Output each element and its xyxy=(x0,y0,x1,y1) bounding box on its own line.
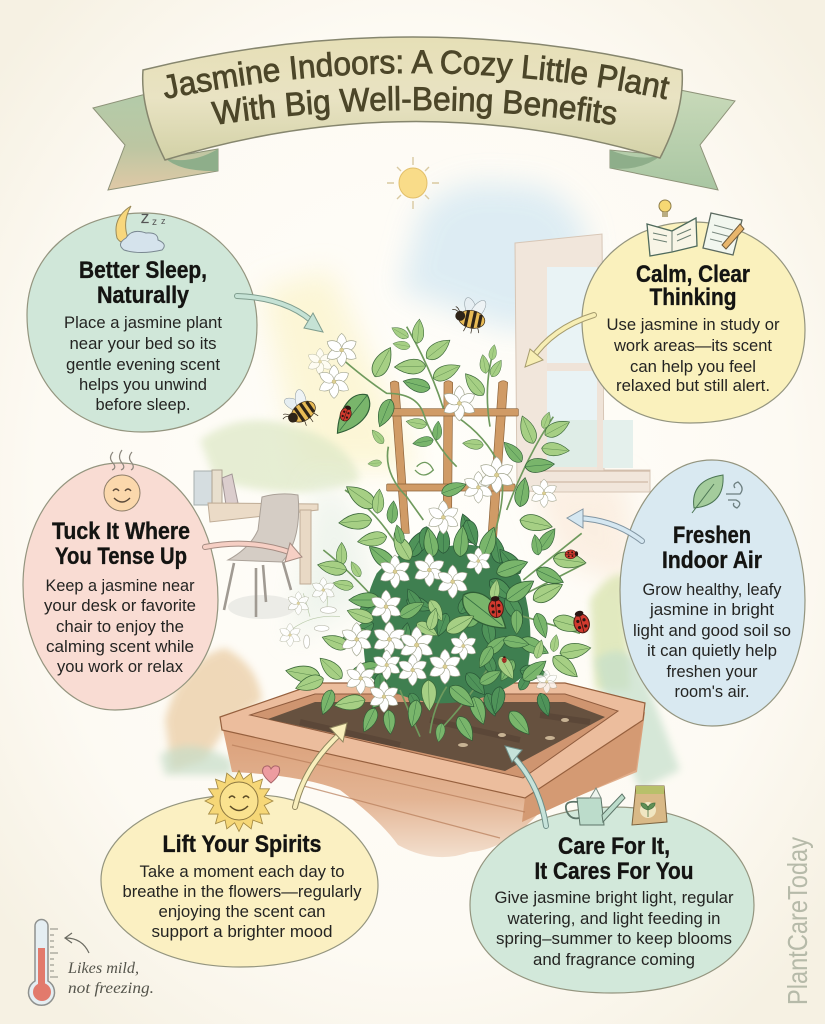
body text: Place a jasmine plant xyxy=(64,313,222,332)
thermometer note xyxy=(28,920,154,1005)
heading: Better Sleep, xyxy=(79,257,207,284)
title text: Jasmine Indoors: A Cozy Little Plant xyxy=(164,50,670,100)
heading xyxy=(636,261,750,311)
body text: helps you unwind xyxy=(79,375,207,394)
body text: spring–summer to keep blooms xyxy=(496,929,732,948)
note text: not freezing. xyxy=(68,980,154,997)
body text: support a brighter mood xyxy=(152,922,332,941)
body text xyxy=(606,315,780,395)
soil xyxy=(268,702,605,771)
body text: before sleep. xyxy=(96,395,190,414)
bees xyxy=(273,293,490,435)
desk, chair and books xyxy=(194,470,318,619)
icon: moon, cloud and zzz xyxy=(116,206,166,252)
icon: smiling face with steam xyxy=(104,450,140,511)
body text: watering, and light feeding in xyxy=(507,909,720,928)
body text xyxy=(633,580,791,701)
icon: moon, cloud and zzz: z xyxy=(161,216,166,226)
body text: your desk or favorite xyxy=(44,596,196,615)
body text xyxy=(122,862,362,941)
arrow: calm to plant xyxy=(525,315,594,367)
note text xyxy=(67,960,154,997)
body text: Grow healthy, leafy xyxy=(642,580,782,599)
mid leaves filling the bush xyxy=(342,525,551,728)
arrow: sleep to plant xyxy=(237,296,323,332)
bush shadow mass xyxy=(363,545,530,703)
body text: it can quietly help xyxy=(647,641,777,660)
faded white left branch xyxy=(278,577,340,648)
trellis xyxy=(387,381,518,537)
arrow: tense to plant xyxy=(205,543,302,562)
stems xyxy=(323,327,585,737)
arrow: air to plant xyxy=(567,509,642,541)
heading xyxy=(534,833,694,885)
body text: chair to enjoy the xyxy=(56,617,184,636)
arrow: care to plant xyxy=(505,746,546,826)
body text: Keep a jasmine near xyxy=(46,576,195,595)
panel: Lift Your Spirits xyxy=(101,766,378,967)
body text xyxy=(494,888,734,969)
title banner xyxy=(92,36,736,191)
heading: Naturally xyxy=(97,282,190,309)
body text: work areas—its scent xyxy=(613,336,772,355)
icon: smiling sun and heart xyxy=(205,766,280,831)
heading: Lift Your Spirits xyxy=(162,831,322,858)
body text: jasmine in bright xyxy=(649,600,774,619)
body text: gentle evening scent xyxy=(66,355,220,374)
heading: Freshen xyxy=(673,522,751,549)
jasmine plant on trellis xyxy=(273,293,592,744)
heading xyxy=(52,518,190,570)
icon: moon, cloud and zzz: Z xyxy=(141,211,149,226)
background scene: sky, rays, foliage washes xyxy=(160,183,680,790)
panel: Calm, Clear Thinking xyxy=(582,200,805,423)
jasmine flowers xyxy=(307,333,558,712)
body text: relaxed but still alert. xyxy=(616,376,770,395)
left ribbon tail xyxy=(93,94,218,190)
body text: light and good soil so xyxy=(633,621,791,640)
body text: freshen your xyxy=(666,662,758,681)
window xyxy=(515,234,650,492)
heading: You Tense Up xyxy=(55,543,187,570)
icon: watering can and fertilizer bag xyxy=(566,786,667,825)
watermark: PlantCareToday xyxy=(782,837,813,1005)
body text: can help you feel xyxy=(630,357,756,376)
body text: calming scent while xyxy=(46,637,194,656)
note text: Likes mild, xyxy=(67,960,139,977)
foliage leaves xyxy=(284,319,592,744)
body text: Use jasmine in study or xyxy=(606,315,780,334)
icon: moon, cloud and zzz: z xyxy=(152,217,157,228)
panel: Freshen Indoor Air xyxy=(620,460,805,726)
panel: Better Sleep, Naturally xyxy=(27,206,257,432)
banner body xyxy=(143,37,682,160)
right ribbon tail xyxy=(610,90,735,190)
body text xyxy=(44,576,196,676)
sun xyxy=(387,157,439,209)
panel: Tuck It Where You Tense Up xyxy=(23,450,218,710)
ladybugs xyxy=(338,404,591,663)
body text xyxy=(64,313,222,414)
dark background leaves xyxy=(350,512,554,718)
planter box xyxy=(220,683,645,857)
heading: Thinking xyxy=(650,284,736,311)
title banner: With Big Well-Being Benefits xyxy=(210,86,616,125)
body text: and fragrance coming xyxy=(533,950,695,969)
heading: Calm, Clear xyxy=(636,261,750,288)
body text: you work or relax xyxy=(57,657,183,676)
body text: near your bed so its xyxy=(70,334,216,353)
body text: room's air. xyxy=(674,682,750,701)
heading: Indoor Air xyxy=(662,547,762,574)
heading: It Cares For You xyxy=(534,858,694,885)
heading: Care For It, xyxy=(558,833,670,860)
body text: Give jasmine bright light, regular xyxy=(494,888,734,907)
body text: Take a moment each day to xyxy=(140,862,344,881)
icon: leaf with breeze xyxy=(692,475,742,513)
icon: thermometer xyxy=(28,920,58,1005)
icon: bulb, book and notepad xyxy=(647,200,744,256)
planter rim xyxy=(220,683,645,798)
body text: breathe in the flowers—regularly xyxy=(122,882,362,901)
panel: Care For It, It Cares For You xyxy=(470,786,754,993)
planter body xyxy=(222,712,645,857)
heading xyxy=(79,257,207,309)
heading: Tuck It Where xyxy=(52,518,190,545)
body text: enjoying the scent can xyxy=(158,902,326,921)
heading xyxy=(662,522,762,574)
arrow: temperature note xyxy=(65,933,89,953)
arrow: spirits to plant xyxy=(295,723,347,807)
